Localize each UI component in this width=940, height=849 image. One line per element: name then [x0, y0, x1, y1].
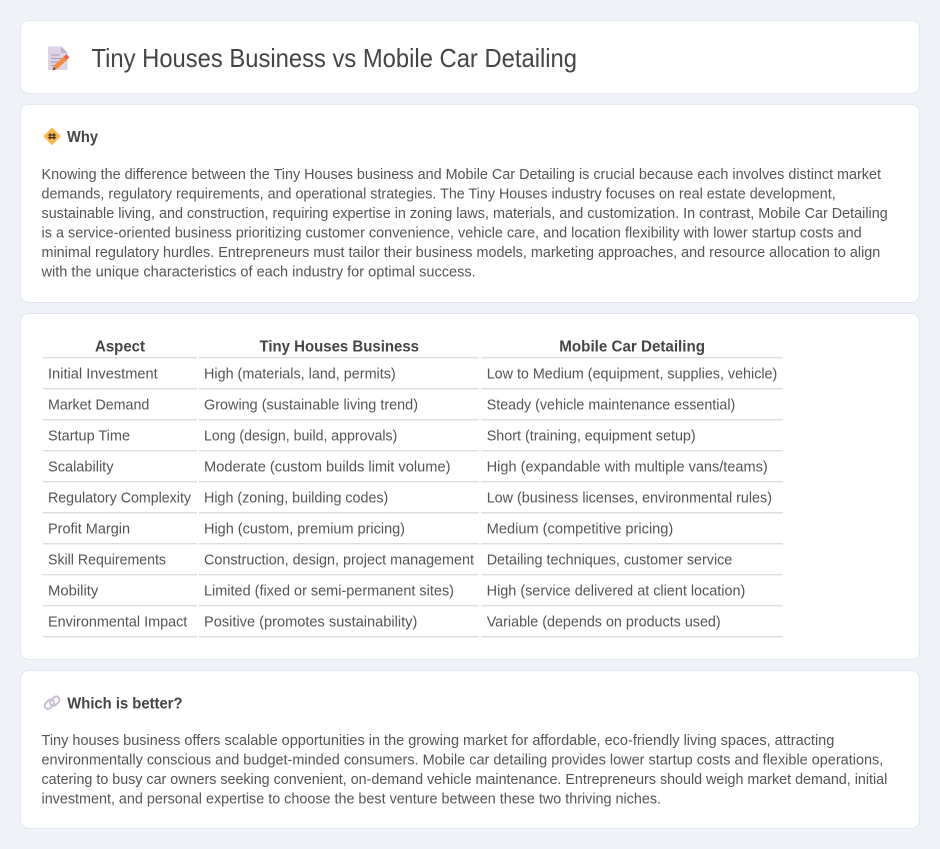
row: market demand: Growing (sustainable living trend) [204, 398, 418, 414]
row: scalability: Moderate (custom builds limit volume) [204, 460, 450, 476]
row: skill requirements [43, 553, 783, 575]
row: initial investment: Initial Investment [48, 367, 158, 383]
why paragraph: is a service-oriented business prioritizing customer convenience, vehicle care, and location flexibility with lower startup costs and [42, 225, 862, 241]
why paragraph: demands, regulatory requirements, and operational strategies. The Tiny Houses industry focuses on real estate development, [42, 186, 836, 202]
which is better paragraph: environmentally conscious and budget-minded consumers. Mobile car detailing provides lower startup costs and flexible operations, [42, 752, 883, 768]
icon: memo with pencil [48, 46, 69, 70]
row: initial investment: Low to Medium (equipment, supplies, vehicle) [487, 367, 777, 383]
why paragraph: with the unique characteristics of each industry for optimal success. [40, 264, 476, 280]
row: mobility: High (service delivered at client location) [487, 584, 745, 600]
row: initial investment: High (materials, land, permits) [204, 367, 396, 383]
row: startup time: Short (training, equipment setup) [487, 429, 696, 445]
row: startup time [43, 429, 783, 451]
why paragraph: minimal regulatory hurdles. Entrepreneurs must tailor their business models, marketing approaches, and resource allocation to align [42, 245, 880, 261]
which is better paragraph: investment, and personal expertise to choose the best venture between these two thriving niches. [42, 791, 661, 807]
panel: which is better [20, 670, 920, 828]
heading: which is better: Which is better? [67, 695, 182, 712]
panel: comparison table [20, 314, 920, 660]
row: initial investment [43, 367, 783, 389]
which is better paragraph: Tiny houses business offers scalable opportunities in the growing market for affordable, eco-friendly living spaces, attracting [42, 733, 834, 749]
why paragraph: sustainable living, and construction, requiring expertise in zoning laws, materials, and customization. In contrast, Mobile Car Detailing [42, 206, 888, 222]
panel: why [20, 104, 920, 302]
row: environmental impact [43, 615, 783, 637]
row: mobility: Mobility [48, 584, 99, 600]
heading: why: Why [67, 129, 98, 146]
row: skill requirements: Construction, design, project management [204, 553, 474, 569]
row: profit margin [43, 522, 783, 544]
title: Tiny Houses Business vs Mobile Car Detailing [92, 45, 577, 73]
icon: chain link [43, 695, 61, 710]
row: skill requirements: Skill Requirements [48, 553, 166, 569]
row: mobility: Limited (fixed or semi-permanent sites) [204, 584, 454, 600]
icon: warning diamond [44, 128, 60, 145]
row: regulatory complexity: Regulatory Complexity [48, 491, 192, 507]
why paragraph [40, 167, 888, 280]
row: scalability: High (expandable with multiple vans/teams) [487, 460, 768, 476]
table header row [43, 338, 783, 358]
table header row: Aspect [95, 338, 146, 355]
row: scalability [43, 460, 783, 482]
row: environmental impact: Positive (promotes sustainability) [204, 615, 417, 631]
why paragraph: Knowing the difference between the Tiny Houses business and Mobile Car Detailing is crucial because each involves distinct market [42, 167, 881, 183]
row: regulatory complexity [43, 491, 783, 513]
table header row: Mobile Car Detailing [559, 338, 705, 355]
row: market demand [43, 398, 783, 420]
panel: title header [20, 20, 920, 94]
row: mobility [43, 584, 783, 606]
row: market demand: Market Demand [48, 398, 149, 414]
row: scalability: Scalability [48, 460, 114, 476]
row: profit margin: Medium (competitive pricing) [487, 522, 673, 538]
row: regulatory complexity: Low (business licenses, environmental rules) [487, 491, 772, 507]
row: environmental impact: Variable (depends on products used) [487, 615, 721, 631]
row: regulatory complexity: High (zoning, building codes) [204, 491, 388, 507]
which is better paragraph [42, 733, 887, 807]
table header row: Tiny Houses Business [260, 338, 419, 355]
row: startup time: Startup Time [48, 429, 130, 445]
row: environmental impact: Environmental Impact [48, 615, 187, 631]
which is better paragraph: catering to busy car owners seeking convenient, on-demand vehicle maintenance. Entrepreneurs should weigh market demand, initial [42, 772, 887, 788]
row: skill requirements: Detailing techniques, customer service [487, 553, 732, 569]
row: startup time: Long (design, build, approvals) [204, 429, 397, 445]
row: profit margin: High (custom, premium pricing) [204, 522, 405, 538]
row: market demand: Steady (vehicle maintenance essential) [487, 398, 735, 414]
row: profit margin: Profit Margin [48, 522, 130, 538]
